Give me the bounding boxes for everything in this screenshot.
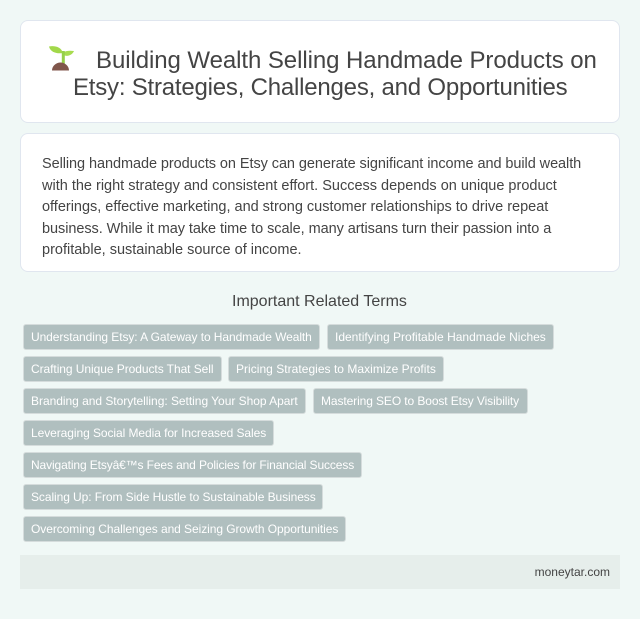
text block: summary: Selling handmade products on Etsy can generate significant income and build wealth (42, 156, 581, 172)
tag: Branding and Storytelling: Setting Your Shop Apart (31, 394, 298, 408)
tag: Scaling Up: From Side Hustle to Sustainable Business (31, 490, 316, 504)
tag (23, 388, 306, 414)
tag (327, 324, 554, 350)
tag (23, 324, 320, 350)
tag (23, 420, 274, 446)
tag: Overcoming Challenges and Seizing Growth Opportunities (31, 522, 338, 536)
text block: summary: offerings, effective marketing, and strong customer relationships to drive repeat (42, 199, 548, 215)
footer bar (20, 555, 620, 589)
icon: seedling (49, 46, 74, 70)
tag (23, 356, 222, 382)
tag (228, 356, 444, 382)
footer text: moneytar.com (535, 565, 610, 579)
heading line 2: Etsy: Strategies, Challenges, and Opportunities (73, 74, 567, 101)
text block: summary (42, 156, 581, 258)
tag (313, 388, 528, 414)
tag: Identifying Profitable Handmade Niches (335, 330, 546, 344)
tag (23, 516, 346, 542)
tag: Pricing Strategies to Maximize Profits (236, 362, 436, 376)
tag: Mastering SEO to Boost Etsy Visibility (321, 394, 519, 408)
tag: Navigating Etsyâ€™s Fees and Policies for Financial Success (31, 458, 354, 472)
text block: summary: business. While it may take time to scale, many artisans turn their passion into a (42, 221, 551, 237)
panel: title card (20, 20, 620, 123)
text block: summary: profitable, sustainable source of income. (42, 242, 302, 258)
panel: summary card (20, 133, 620, 272)
text block: summary: with the right strategy and consistent effort. Success depends on unique product (42, 178, 557, 194)
tag list (23, 324, 554, 542)
heading line 1: Building Wealth Selling Handmade Products on (96, 47, 597, 74)
tag (23, 452, 362, 478)
tag (23, 484, 323, 510)
tag: Crafting Unique Products That Sell (31, 362, 214, 376)
heading: important related terms: Important Related Terms (232, 293, 407, 310)
tag: Leveraging Social Media for Increased Sales (31, 426, 266, 440)
tag: Understanding Etsy: A Gateway to Handmade Wealth (31, 330, 312, 344)
